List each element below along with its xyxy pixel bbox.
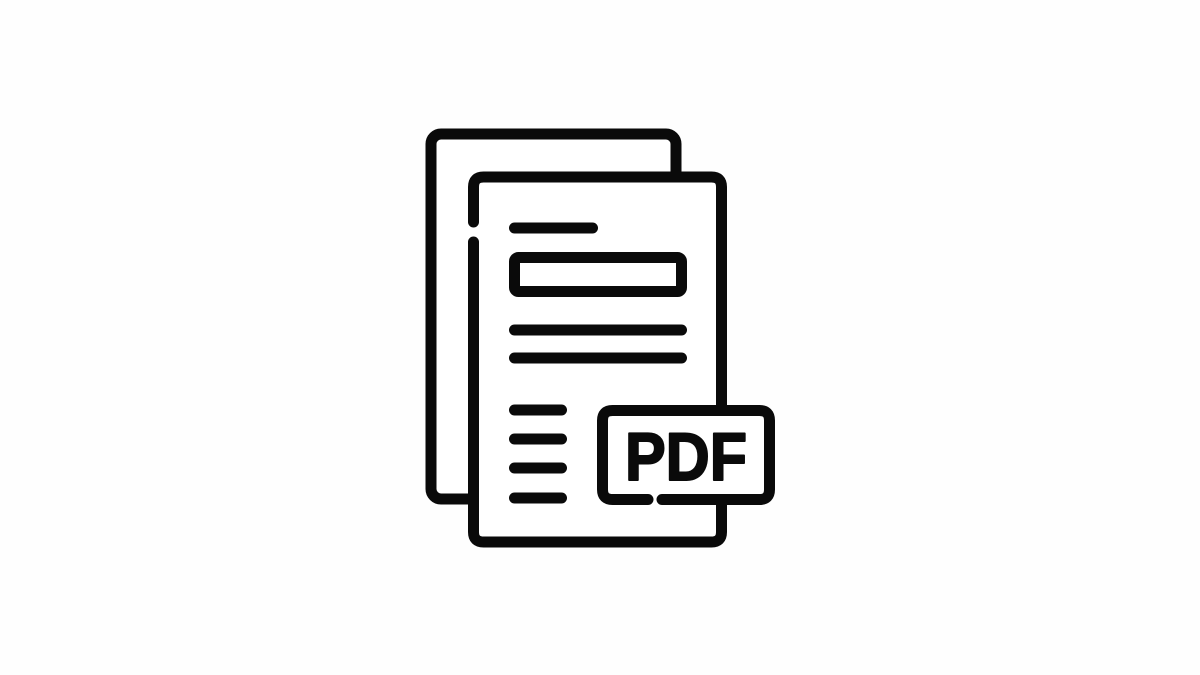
- text lines: [514, 228, 682, 498]
- back page: [431, 134, 676, 499]
- pdf label: PDF: [625, 419, 747, 495]
- pdf badge: [602, 410, 770, 500]
- front page: [474, 177, 722, 542]
